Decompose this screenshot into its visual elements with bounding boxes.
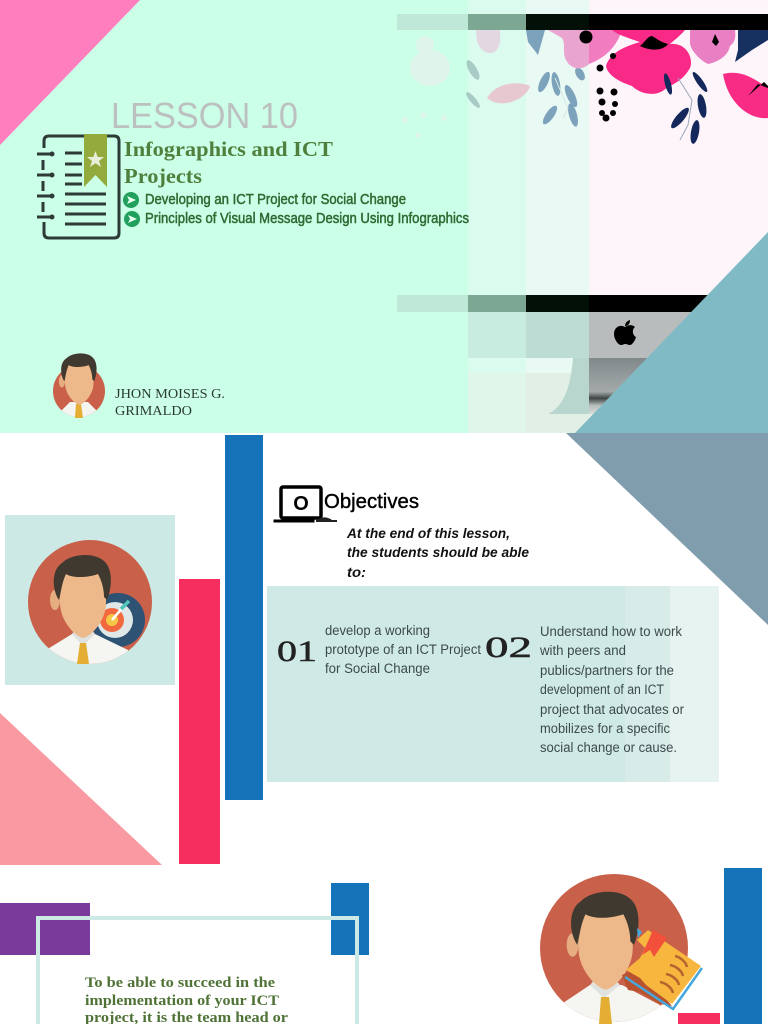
- blue square bar: [331, 883, 369, 955]
- blue-gray leaves: [526, 30, 587, 128]
- icon: notebook with bookmark: [37, 134, 119, 238]
- icon: apple logo: [614, 320, 636, 345]
- text: author name: JHON MOISES G.: [115, 387, 225, 402]
- text: objective 2: project that advocates or: [540, 702, 684, 717]
- icon: computer monitor: O: [293, 493, 309, 515]
- text: objective 2: social change or cause.: [540, 740, 677, 755]
- red bar: [678, 1013, 720, 1024]
- faint strip flowers: [402, 36, 450, 138]
- red bar: [179, 579, 220, 864]
- text: objective 2: development of an ICT: [540, 682, 664, 697]
- text: objective 2: publics/partners for the: [540, 663, 674, 678]
- outlined text frame: [38, 918, 357, 1024]
- heading: lesson title: Infographics and ICT: [124, 137, 334, 161]
- pink triangle: [0, 713, 162, 865]
- text: objective 1: prototype of an ICT Project: [325, 642, 481, 657]
- monitor photo background: [397, 0, 768, 433]
- text: objectives intro: to:: [347, 564, 366, 580]
- text: team head paragraph: To be able to succeed in the: [85, 975, 275, 991]
- text: objectives intro: At the end of this lesson,: [346, 525, 510, 541]
- pale and pink flowers: [548, 30, 589, 68]
- heading: lesson title: Projects: [124, 164, 202, 188]
- text: objective 2: mobilizes for a specific: [540, 721, 670, 736]
- icon: bullet arrow 1: [123, 192, 139, 208]
- icon: bullet arrow 2: [124, 211, 140, 227]
- text: author name: GRIMALDO: [115, 404, 192, 419]
- text: objective 2: with peers and: [539, 643, 626, 658]
- icon: man with target: [28, 540, 152, 670]
- avatar panel: [5, 515, 175, 685]
- text: topic 1: Developing an ICT Project for Social Change: [145, 192, 406, 208]
- blue bar: [225, 435, 263, 800]
- purple bar: [0, 903, 90, 955]
- number 01: 01: [277, 635, 317, 668]
- teal triangle: [575, 232, 768, 433]
- panel: title slide: [0, 0, 768, 433]
- panel: objectives slide: [0, 433, 768, 865]
- text: objective 1: for Social Change: [325, 661, 430, 676]
- pink triangle: [0, 0, 140, 145]
- text: topic 2: Principles of Visual Message Design Using Infographics: [145, 211, 469, 227]
- icon: man with book: [540, 874, 702, 1024]
- icon: author avatar: [52, 353, 106, 420]
- heading: objectives: Objectives: [324, 491, 419, 513]
- navy leaves: [662, 70, 709, 145]
- flowers illustration: [402, 30, 768, 145]
- heading: lesson number: LESSON 10: [111, 95, 298, 136]
- text: team head paragraph: implementation of your ICT: [85, 993, 279, 1009]
- text: objective 1: develop a working: [325, 623, 430, 638]
- panel: team head slide: [0, 868, 762, 1024]
- gray-blue triangle: [566, 433, 768, 625]
- text: objectives intro: the students should be able: [347, 544, 529, 560]
- number 02: 02: [485, 631, 532, 664]
- flower centres: [580, 30, 768, 96]
- text: objective 2: Understand how to work: [540, 624, 682, 639]
- icon: computer monitor: [274, 487, 337, 522]
- blue bar: [724, 868, 762, 1024]
- objectives panel: [267, 586, 719, 782]
